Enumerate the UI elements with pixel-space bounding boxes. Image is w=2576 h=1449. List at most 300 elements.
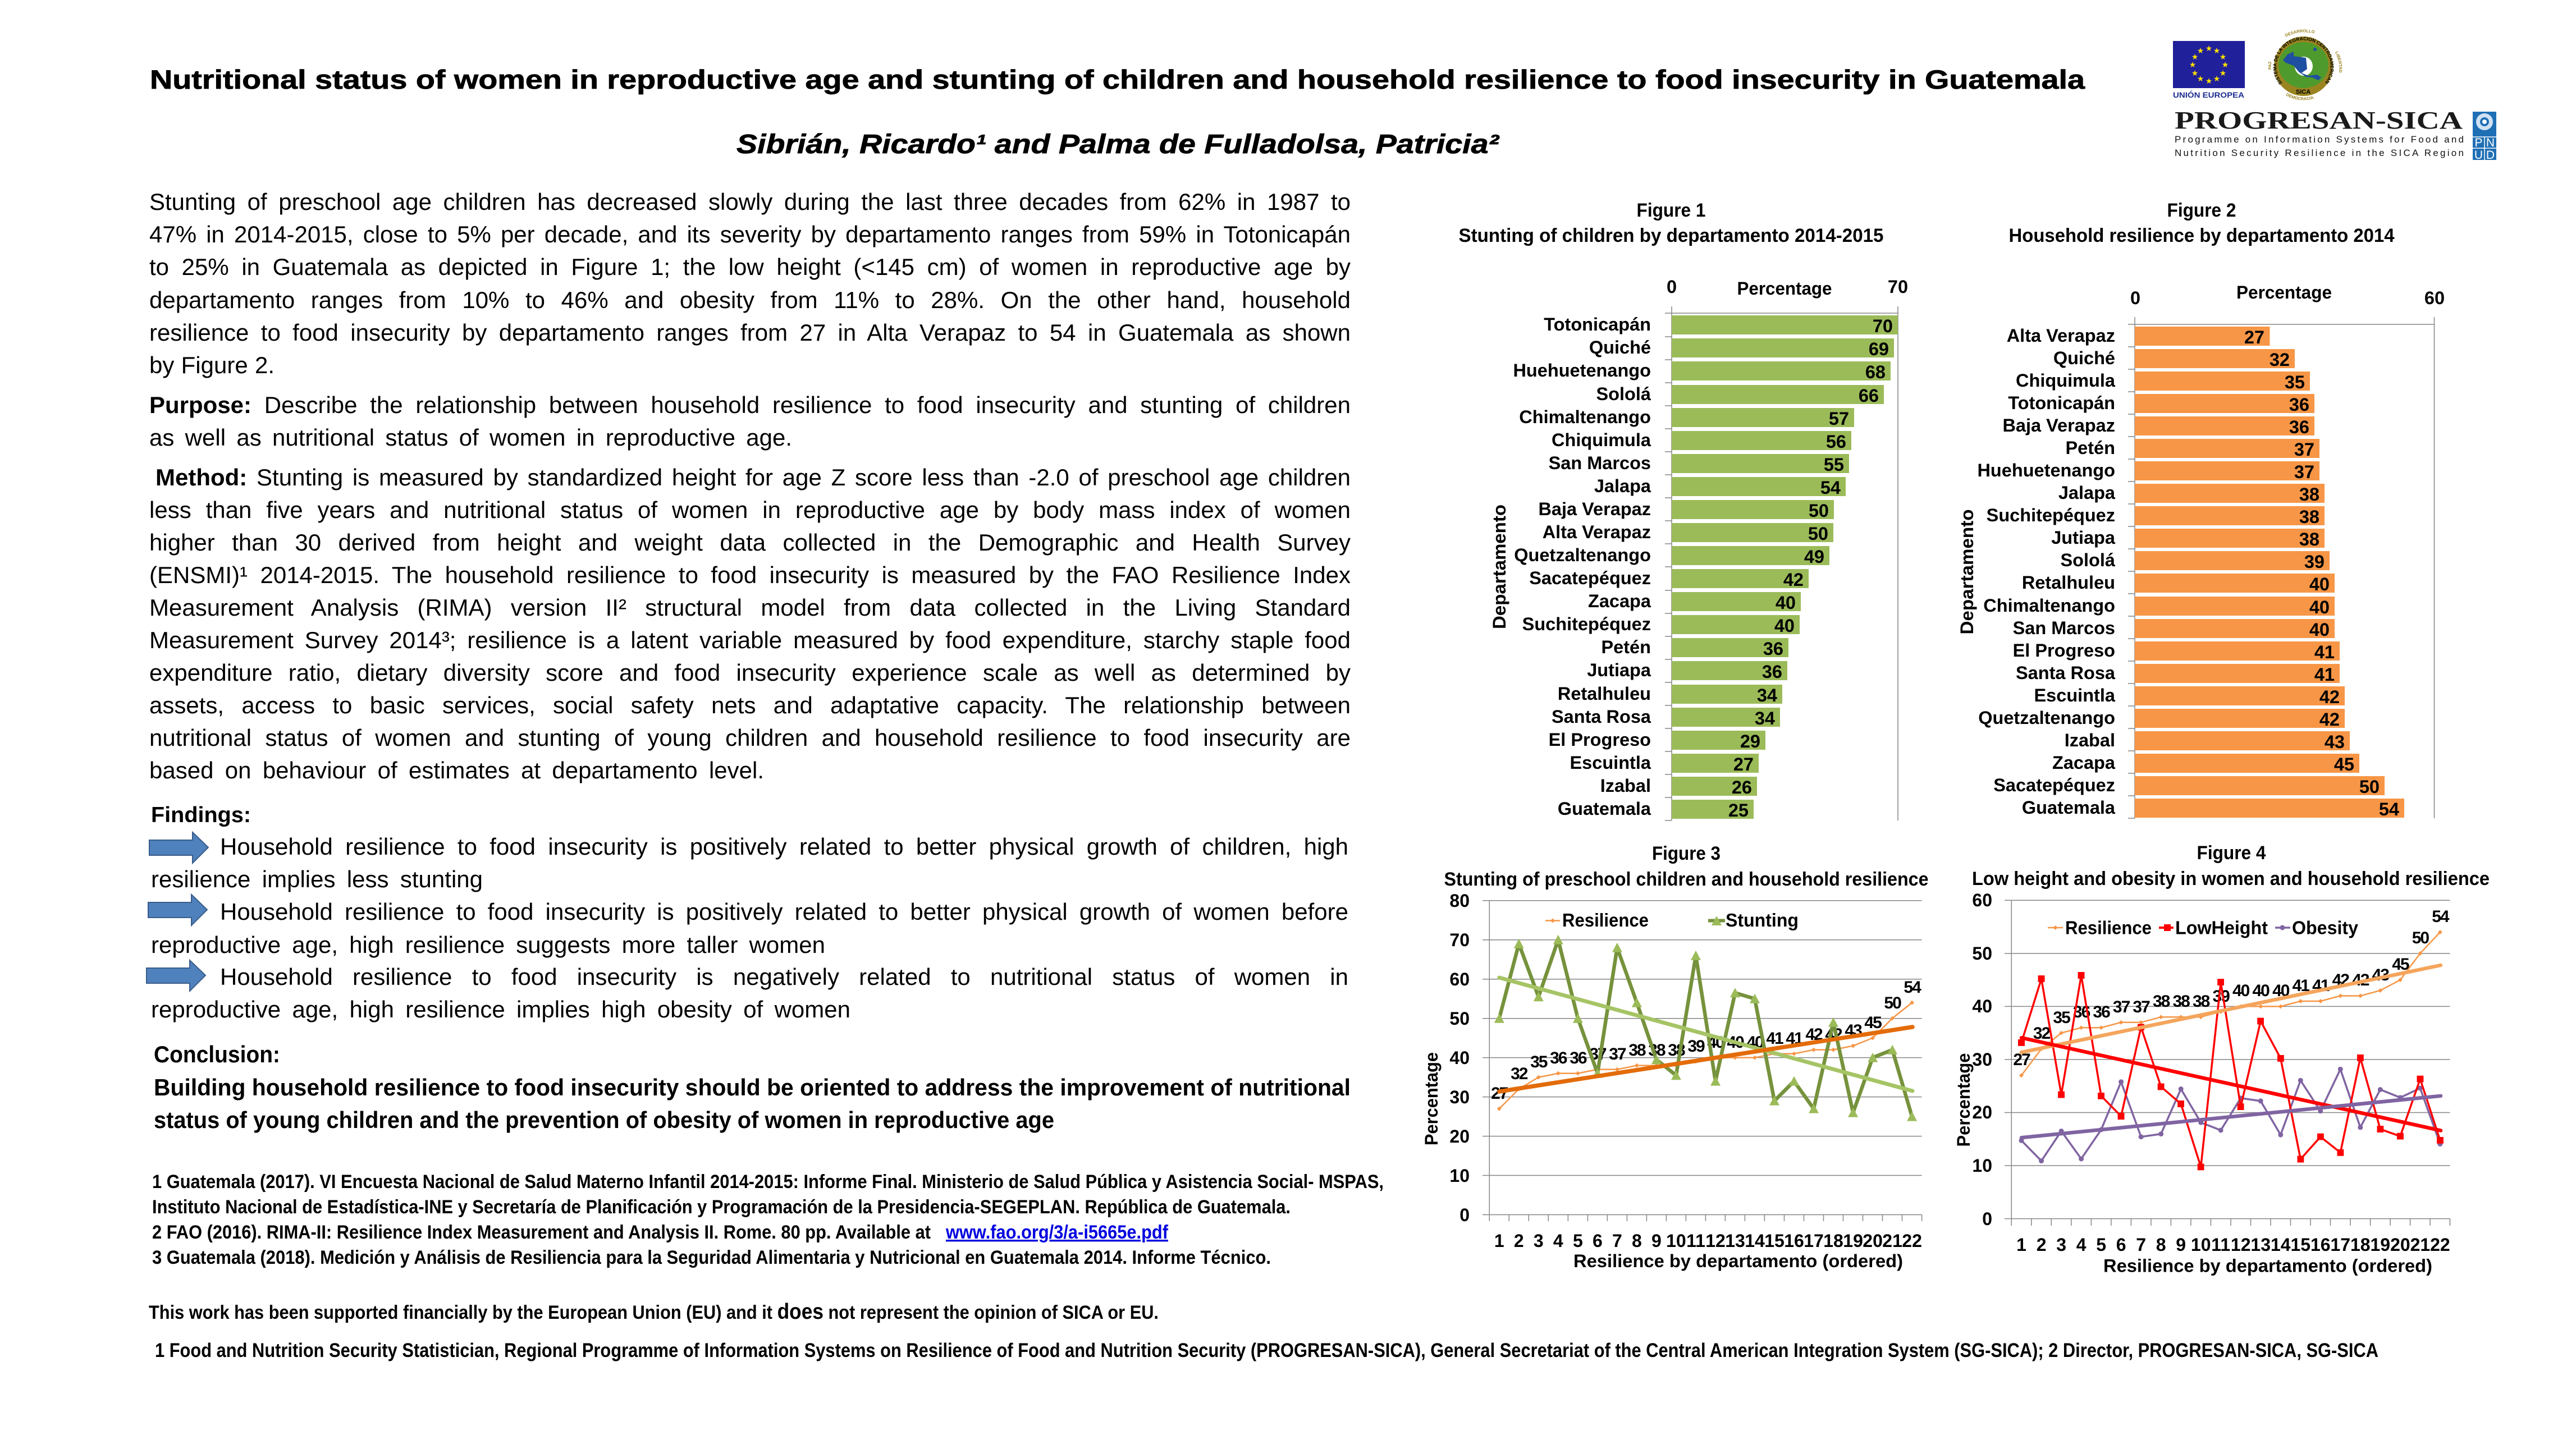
department labels figure 1: Sololá: [1596, 384, 1651, 404]
value labels figure 2: 40: [2309, 620, 2330, 640]
text block: method: Measurement Analysis (RIMA) version II² structural model from data collected in the Living Standard: [149, 594, 1351, 621]
text block: introduction: 47% in 2014-2015, close to 5% per decade, and its severity by departamento ranges from 59% in Totonicapán: [149, 221, 1351, 247]
value labels figure 1: 40: [1776, 593, 1796, 613]
department labels figure 1: Suchitepéquez: [1522, 614, 1651, 634]
data labels figure 3: 36: [1570, 1049, 1587, 1067]
x axis figure 3: 4: [1553, 1231, 1563, 1251]
logo: PROGRESAN-SICA: [2175, 107, 2464, 158]
text block: method: higher than 30 derived from height and weight data collected in the Demographic and Health Survey: [149, 529, 1351, 556]
y axis figure 3: 80: [1449, 891, 1470, 911]
funding note: This work has been supported financially by the European Union (EU) and it does not represent the opinion of SICA or EU.: [149, 1300, 1159, 1324]
data labels figure 3: 41: [1766, 1029, 1783, 1048]
obesity series figure 4: [2021, 1069, 2440, 1161]
department labels figure 1: Chimaltenango: [1519, 407, 1651, 427]
data labels figure 3: 37: [1609, 1045, 1626, 1063]
text block: findings: Household resilience to food insecurity is positively related to better physical growth of women before: [220, 898, 1348, 925]
stunting series figure 3: [1499, 940, 1912, 1117]
department labels figure 1: Escuintla: [1570, 753, 1651, 773]
logo: European Union: ★: [2197, 46, 2204, 55]
obesity trend figure 4: [2021, 1096, 2441, 1138]
figure 1 heading: Stunting of children by departamento 2014-2015: [1458, 225, 1884, 246]
data labels figure 4: 35: [2053, 1008, 2070, 1027]
arrow: finding 1: [149, 832, 208, 863]
data labels figure 4: 42: [2352, 971, 2369, 989]
value labels figure 2: 35: [2285, 372, 2305, 392]
y axis figure 4: 40: [1972, 996, 1992, 1016]
data labels figure 4: 38: [2173, 992, 2190, 1011]
value labels figure 2: [2244, 327, 2399, 819]
department labels figure 1: Baja Verapaz: [1538, 499, 1651, 519]
y axis figure 4: 0: [1982, 1209, 1992, 1229]
department labels figure 2: Quetzaltenango: [1978, 708, 2115, 728]
x axis figure 4: 12: [2231, 1235, 2250, 1255]
department labels figure 2: Santa Rosa: [2016, 663, 2116, 683]
data labels figure 3: 50: [1884, 994, 1901, 1012]
value labels figure 1: 68: [1865, 362, 1886, 382]
data labels figure 4: 38: [2153, 992, 2170, 1011]
text block: findings: reproductive age, high resilience suggests more taller women: [151, 932, 825, 958]
figure 1 heading: [1458, 200, 1884, 246]
heading: findings: Findings:: [151, 803, 251, 827]
department labels figure 1: Izabal: [1600, 776, 1651, 796]
legend figure 3: Stunting: [1726, 910, 1799, 930]
text block: purpose: [149, 392, 1351, 451]
data labels figure 3: 27: [1491, 1084, 1508, 1103]
x axis figure 4: 2: [2037, 1235, 2046, 1255]
x axis figure 3: 22: [1902, 1231, 1922, 1251]
data labels figure 3: 42: [1825, 1025, 1842, 1044]
department labels figure 2: San Marcos: [2013, 618, 2115, 638]
arrow: finding 3: [147, 960, 205, 991]
text block: method: assets, access to basic services, social safety nets and adaptative capacity. The relationship between: [149, 692, 1351, 718]
data labels figure 3: 38: [1668, 1041, 1685, 1060]
department labels figure 2: Quiché: [2053, 348, 2115, 368]
x axis figure 3: 9: [1651, 1231, 1662, 1251]
x axis figure 4: 5: [2096, 1235, 2106, 1255]
x axis figure 4: 13: [2250, 1235, 2271, 1255]
value labels figure 1: 42: [1783, 570, 1804, 590]
value labels figure 1: 69: [1869, 339, 1889, 359]
legend figure 3: [1545, 910, 1799, 930]
data labels figure 4: 36: [2073, 1003, 2090, 1021]
figure 2 heading: [2008, 200, 2395, 246]
y axis figure 3: 10: [1449, 1166, 1470, 1186]
department labels figure 1: Guatemala: [1558, 799, 1651, 819]
logo: PNUD: [2473, 112, 2496, 162]
value labels figure 1: [1728, 316, 1893, 820]
text block: method: based on behaviour of estimates at departamento level.: [149, 757, 764, 783]
department labels figure 2: Huehuetenango: [1977, 460, 2115, 480]
logo: European Union: ★: [2220, 52, 2226, 61]
x axis figure 3: 12: [1705, 1231, 1726, 1251]
value labels figure 2: 50: [2359, 777, 2380, 797]
value labels figure 2: 43: [2325, 732, 2345, 752]
text block: method: [149, 464, 1351, 783]
logo: European Union: ★: [2189, 60, 2196, 69]
data labels figure 4: 50: [2412, 929, 2429, 947]
data labels figure 4: 40: [2272, 982, 2290, 1000]
chart: figure 1 stunting bars: [1458, 200, 1908, 820]
logo: PROGRESAN-SICA: PROGRESAN-SICA: [2175, 107, 2463, 134]
value labels figure 2: 39: [2304, 552, 2325, 572]
text block: findings: resilience implies less stunting: [151, 866, 483, 892]
value labels figure 2: 41: [2314, 642, 2335, 662]
axis labels figure 2: 0: [2130, 288, 2140, 308]
department labels figure 1: [1513, 314, 1651, 819]
legend figure 4: Resilience: [2065, 917, 2152, 938]
value labels figure 1: 36: [1763, 639, 1783, 659]
stunting trend figure 3: [1499, 978, 1912, 1091]
resilience series figure 3: [1499, 1003, 1912, 1109]
logo: SICA: PAZ: [2267, 61, 2272, 70]
value labels figure 2: 40: [2309, 574, 2330, 594]
department labels figure 1: Huehuetenango: [1513, 360, 1651, 380]
x axis figure 3: 11: [1686, 1231, 1705, 1251]
text block: introduction: departamento ranges from 10% to 46% and obesity from 11% to 28%. On the other hand, household: [149, 287, 1351, 313]
value labels figure 2: 36: [2289, 417, 2309, 437]
logo: SICA: DEMOCRACIA: [2286, 93, 2314, 100]
x axis figure 3: 6: [1593, 1231, 1603, 1251]
logo: PNUD: P: [2474, 136, 2483, 149]
x axis figure 3: 16: [1784, 1231, 1804, 1251]
x axis figure 4: 16: [2310, 1235, 2331, 1255]
x axis figure 3: 10: [1666, 1231, 1686, 1251]
value labels figure 1: 70: [1873, 316, 1893, 336]
value labels figure 2: 38: [2299, 529, 2319, 549]
department labels figure 1: Sacatepéquez: [1529, 568, 1651, 588]
department labels figure 1: Jalapa: [1594, 476, 1651, 496]
y axis figure 4: [1953, 890, 1992, 1229]
x axis figure 4: 3: [2056, 1235, 2066, 1255]
resilience series figure 4: [2021, 932, 2440, 1075]
figure 4 heading: Low height and obesity in women and household resilience: [1972, 868, 2490, 889]
data labels figure 4: 37: [2133, 998, 2150, 1016]
figure 2 heading: Figure 2: [2167, 200, 2236, 221]
logo: PROGRESAN-SICA: Programme on Information Systems for Food and: [2175, 134, 2464, 145]
department labels figure 1: Zacapa: [1588, 591, 1651, 611]
department labels figure 2: Jutiapa: [2051, 528, 2116, 548]
value labels figure 2: 32: [2270, 350, 2290, 370]
department labels figure 1: Santa Rosa: [1552, 707, 1651, 727]
y axis figure 3: 50: [1449, 1008, 1470, 1029]
value labels figure 1: 56: [1826, 432, 1846, 452]
value labels figure 2: 27: [2244, 327, 2264, 347]
department labels figure 2: Izabal: [2065, 730, 2115, 750]
text block: method: nutritional status of women and stunting of young children and household resilience to food insecurity are: [149, 724, 1351, 751]
chart: figure 4 low height, obesity and resilience: [1953, 842, 2490, 1276]
x axis figure 3: 15: [1764, 1231, 1785, 1251]
value labels figure 2: 38: [2299, 484, 2319, 505]
figure 4 heading: Figure 4: [2197, 842, 2266, 864]
value labels figure 1: 25: [1728, 800, 1749, 820]
value labels figure 1: 36: [1762, 662, 1782, 682]
data labels figure 4: 42: [2332, 971, 2349, 989]
data labels figure 4: 27: [2013, 1051, 2030, 1069]
y axis figure 4: Percentage: [1953, 1053, 1974, 1147]
value labels figure 1: 66: [1859, 386, 1879, 406]
department labels figure 2: Totonicapán: [2008, 393, 2115, 413]
data labels figure 3: 38: [1648, 1041, 1666, 1060]
arrow: finding 2: [148, 895, 207, 925]
x axis figure 3: 14: [1745, 1231, 1765, 1251]
text block: introduction: Stunting of preschool age children has decreased slowly during the last three decades from 62% in 1987 to: [149, 189, 1351, 215]
conclusion: Building household resilience to food insecurity should be oriented to address the improvement of nutritional: [154, 1074, 1351, 1100]
text block: method: expenditure ratio, dietary diversity score and food insecurity experience scale as well as determined by: [149, 659, 1351, 686]
text block: method: less than five years and nutritional status of women in reproductive age by body mass index of women: [149, 497, 1351, 523]
value labels figure 1: 34: [1757, 685, 1777, 705]
logo: SICA: DESARROLLO: [2285, 29, 2315, 37]
department labels figure 2: Petén: [2065, 438, 2115, 458]
y axis figure 3: 30: [1449, 1087, 1470, 1107]
department labels figure 2: Baja Verapaz: [2002, 415, 2115, 435]
text block: introduction: resilience to food insecurity by departamento ranges from 27 in Alta Verapaz to 54 in Guatemala as shown: [149, 319, 1351, 346]
chart: figure 2 resilience bars: [1957, 200, 2445, 819]
department labels figure 2: Retalhuleu: [2022, 572, 2115, 593]
data labels figure 4: 36: [2093, 1003, 2110, 1021]
y axis figure 3: 20: [1449, 1126, 1470, 1147]
data labels figure 4: 38: [2193, 992, 2210, 1011]
x axis figure 3: 13: [1725, 1231, 1745, 1251]
x axis figure 3: 2: [1514, 1231, 1524, 1251]
x axis figure 3: 1: [1494, 1231, 1504, 1251]
figure 3 heading: [1444, 843, 1929, 890]
value labels figure 2: 37: [2294, 439, 2314, 460]
data labels figure 3: 40: [1727, 1033, 1744, 1052]
department labels figure 2: Escuintla: [2034, 685, 2116, 705]
axis labels figure 1: 0: [1667, 277, 1677, 297]
figure 3 heading: Figure 3: [1652, 843, 1721, 864]
references: 2 FAO (2016). RIMA-II: Resilience Index Measurement and Analysis II. Rome. 80 pp. Available at: [152, 1222, 931, 1243]
department labels figure 2: Jalapa: [2058, 483, 2116, 503]
text block: findings: Household resilience to food insecurity is negatively related to nutritional status of women in: [220, 964, 1348, 990]
data labels figure 3: 32: [1511, 1065, 1528, 1083]
references: 1 Guatemala (2017). VI Encuesta Nacional de Salud Materno Infantil 2014-2015: Informe Final. Ministerio de Salud Pública y Asistencia Social- MSPAS,: [152, 1171, 1384, 1193]
department labels figure 2: Zacapa: [2052, 753, 2116, 773]
y axis figure 3: 60: [1449, 969, 1470, 989]
x axis figure 4: 6: [2116, 1235, 2126, 1255]
value labels figure 2: 37: [2294, 462, 2314, 482]
department labels figure 2: Guatemala: [2022, 797, 2116, 818]
department labels figure 1: San Marcos: [1549, 453, 1651, 473]
x axis figure 3: 3: [1534, 1231, 1544, 1251]
data labels figure 4: 40: [2253, 982, 2270, 1000]
value labels figure 1: 29: [1740, 731, 1760, 751]
department labels figure 1: El Progreso: [1549, 730, 1651, 750]
legend figure 3: Resilience: [1562, 910, 1649, 930]
value labels figure 2: 42: [2319, 709, 2340, 730]
logo: European Union: ★: [2222, 60, 2229, 69]
axis labels figure 1: Departamento: [1489, 505, 1509, 629]
value labels figure 2: 40: [2309, 597, 2330, 617]
value labels figure 2: 45: [2334, 754, 2354, 774]
figure 3 heading: Stunting of preschool children and household resilience: [1444, 869, 1929, 890]
text block: introduction: [149, 189, 1351, 378]
legend figure 4: Obesity: [2292, 917, 2359, 938]
x axis figure 3: 20: [1863, 1231, 1883, 1251]
department labels figure 2: El Progreso: [2013, 640, 2115, 661]
department labels figure 1: Totonicapán: [1544, 314, 1651, 334]
department labels figure 2: [1977, 325, 2116, 818]
logo: European Union: ★: [2220, 68, 2226, 77]
figure 2 heading: Household resilience by departamento 2014: [2008, 225, 2395, 246]
department labels figure 1: Quetzaltenango: [1514, 545, 1651, 565]
logo: European Union: ★: [2206, 44, 2212, 53]
value labels figure 2: 36: [2289, 395, 2309, 415]
axis labels figure 2: Departamento: [1957, 510, 1977, 634]
figure 4 heading: [1972, 842, 2490, 889]
figure 1 heading: Figure 1: [1637, 200, 1705, 221]
legend figure 4: LowHeight: [2175, 917, 2268, 938]
x axis figure 4: 19: [2371, 1235, 2390, 1255]
department labels figure 1: Chiquimula: [1552, 430, 1651, 450]
y axis figure 4: 30: [1972, 1049, 1992, 1070]
x axis figure 4: 21: [2410, 1235, 2430, 1255]
data labels figure 4: 39: [2213, 987, 2230, 1006]
text block: method: Measurement Survey 2014³; resilience is a latent variable measured by food expenditure, starchy staple food: [149, 627, 1351, 653]
value labels figure 1: 40: [1774, 616, 1795, 636]
x axis figure 4: 22: [2430, 1235, 2450, 1255]
department labels figure 1: Alta Verapaz: [1543, 522, 1651, 542]
logo: European Union: ★: [2197, 74, 2204, 83]
axis labels figure 1: [1489, 277, 1908, 629]
department labels figure 2: Sacatepéquez: [1993, 775, 2115, 795]
department labels figure 2: Sololá: [2060, 550, 2116, 570]
data labels figure 3: 36: [1550, 1049, 1567, 1067]
data labels figure 4: 45: [2392, 955, 2409, 974]
x axis figure 3: Resilience by departamento (ordered): [1573, 1251, 1903, 1271]
department labels figure 2: Suchitepéquez: [1987, 505, 2115, 525]
y axis figure 4: 20: [1972, 1102, 1992, 1122]
y axis figure 4: 60: [1972, 890, 1992, 910]
data labels figure 4: 41: [2293, 976, 2309, 995]
data labels figure 3: 40: [1746, 1033, 1764, 1052]
logo: European Union: ★: [2213, 74, 2220, 83]
logo: European Union: ★: [2191, 52, 2198, 61]
authors: Sibrián, Ricardo¹ and Palma de Fulladolsa, Patricia²: [736, 130, 1500, 159]
y axis figure 3: 0: [1459, 1205, 1470, 1225]
logo: PNUD: N: [2486, 136, 2495, 149]
axis labels figure 1: Percentage: [1737, 278, 1832, 299]
data labels figure 3: 38: [1628, 1041, 1646, 1060]
data labels figure 4: [2013, 907, 2450, 1069]
references: 3 Guatemala (2018). Medición y Análisis de Resiliencia para la Seguridad Alimentaria y Nutricional en Guatemala 2014. Informe Técnico.: [152, 1247, 1271, 1268]
axis labels figure 1: 70: [1888, 277, 1908, 297]
department labels figure 1: Quiché: [1589, 337, 1651, 357]
x axis figure 3: 8: [1632, 1231, 1642, 1251]
logo: SICA: [2267, 29, 2342, 100]
logo: European Union: ★: [2213, 46, 2220, 55]
bars figure 1: [1672, 315, 1898, 819]
data labels figure 3: 35: [1530, 1053, 1548, 1071]
text block: method: Method: Stunting is measured by standardized height for age Z score less than -2.0 of preschool age children: [155, 464, 1351, 490]
department labels figure 1: Petén: [1601, 637, 1651, 657]
department labels figure 2: Alta Verapaz: [2007, 325, 2115, 346]
logo: European Union: ★: [2206, 76, 2212, 85]
text block: findings: [151, 833, 1348, 1022]
x axis figure 4: 1: [2016, 1235, 2026, 1255]
x axis figure 3: 19: [1843, 1231, 1863, 1251]
x axis figure 4: 10: [2191, 1235, 2211, 1255]
low height series figure 4: [2021, 975, 2440, 1167]
data labels figure 3: 54: [1904, 978, 1921, 997]
text block: method: (ENSMI)¹ 2014-2015. The household resilience to food insecurity is measured by the FAO Resilience Index: [149, 562, 1351, 588]
data labels figure 3: 42: [1805, 1025, 1823, 1044]
x axis figure 3: 21: [1882, 1231, 1902, 1251]
references: [152, 1171, 1384, 1268]
text block: findings: reproductive age, high resilience implies high obesity of women: [151, 996, 850, 1022]
conclusion: Conclusion:: [154, 1041, 280, 1067]
logo: PROGRESAN-SICA: Nutrition Security Resilience in the SICA Region: [2175, 148, 2464, 158]
data labels figure 3: 39: [1687, 1037, 1705, 1056]
logo: European Union: [2173, 41, 2245, 99]
text block: purpose: Purpose: Describe the relationship between household resilience to food insecurity and stunting of children: [149, 392, 1351, 418]
x axis figure 4: 8: [2156, 1235, 2166, 1255]
text block: introduction: to 25% in Guatemala as depicted in Figure 1; the low height (<145 cm) of women in reproductive age by: [149, 254, 1351, 280]
y axis figure 3: [1421, 891, 1470, 1225]
resilience trend figure 4: [2021, 965, 2441, 1052]
resilience trend figure 3: [1499, 1027, 1912, 1092]
x axis figure 4: 7: [2136, 1235, 2146, 1255]
logo: European Union: ★: [2191, 68, 2198, 77]
logo: PNUD: D: [2486, 149, 2495, 162]
value labels figure 1: 34: [1755, 708, 1775, 728]
department labels figure 1: Jutiapa: [1587, 660, 1651, 680]
references: www.fao.org/3/a-i5665e.pdf: [945, 1222, 1169, 1243]
text block: findings: Household resilience to food insecurity is positively related to better physical growth of children, high: [220, 833, 1348, 860]
department labels figure 1: Retalhuleu: [1558, 684, 1651, 704]
text block: introduction: by Figure 2.: [149, 352, 274, 378]
logo: SICA: LIBERTAD: [2335, 51, 2342, 73]
conclusion: status of young children and the prevention of obesity of women in reproductive age: [154, 1107, 1054, 1133]
data labels figure 3: 37: [1589, 1045, 1607, 1063]
value labels figure 2: 41: [2314, 664, 2335, 685]
value labels figure 1: 50: [1809, 501, 1829, 521]
y axis figure 4: 10: [1972, 1155, 1992, 1176]
x axis figure 4: 14: [2271, 1235, 2291, 1255]
axis labels figure 2: 60: [2424, 288, 2445, 308]
y axis figure 3: Percentage: [1421, 1052, 1442, 1145]
data labels figure 3: 45: [1864, 1014, 1882, 1032]
value labels figure 1: 55: [1824, 455, 1844, 475]
references: Instituto Nacional de Estadística-INE y Secretaría de Planificación y Programación de la Presidencia-SEGEPLAN. República de Guatemala.: [152, 1196, 1291, 1218]
y axis figure 4: 50: [1972, 943, 1992, 964]
legend figure 4: [2048, 917, 2359, 938]
value labels figure 1: 26: [1732, 777, 1752, 797]
logo: SICA: SICA: [2296, 89, 2310, 95]
department labels figure 2: Chiquimula: [2016, 370, 2116, 391]
bars figure 2: [2135, 327, 2404, 818]
value labels figure 1: 50: [1808, 524, 1828, 544]
x axis figure 4: 4: [2076, 1235, 2087, 1255]
department labels figure 2: Chimaltenango: [1983, 595, 2115, 616]
data labels figure 4: 32: [2033, 1024, 2051, 1043]
x axis figure 4: 20: [2390, 1235, 2410, 1255]
data labels figure 3: 43: [1845, 1021, 1862, 1040]
y axis figure 3: 40: [1449, 1048, 1470, 1068]
logo: European Union: UNIÓN EUROPEA: [2173, 90, 2244, 99]
data labels figure 3: 41: [1786, 1029, 1803, 1048]
data labels figure 3: 40: [1707, 1033, 1724, 1052]
x axis figure 4: 9: [2176, 1235, 2186, 1255]
value labels figure 1: 49: [1804, 547, 1824, 567]
conclusion: [154, 1041, 1351, 1133]
x axis figure 3: 18: [1823, 1231, 1843, 1251]
x axis figure 3: 17: [1804, 1231, 1824, 1251]
value labels figure 1: 57: [1829, 409, 1849, 429]
value labels figure 2: 38: [2299, 507, 2319, 527]
x axis figure 3: [1494, 1231, 1922, 1271]
data labels figure 4: 54: [2432, 907, 2450, 926]
